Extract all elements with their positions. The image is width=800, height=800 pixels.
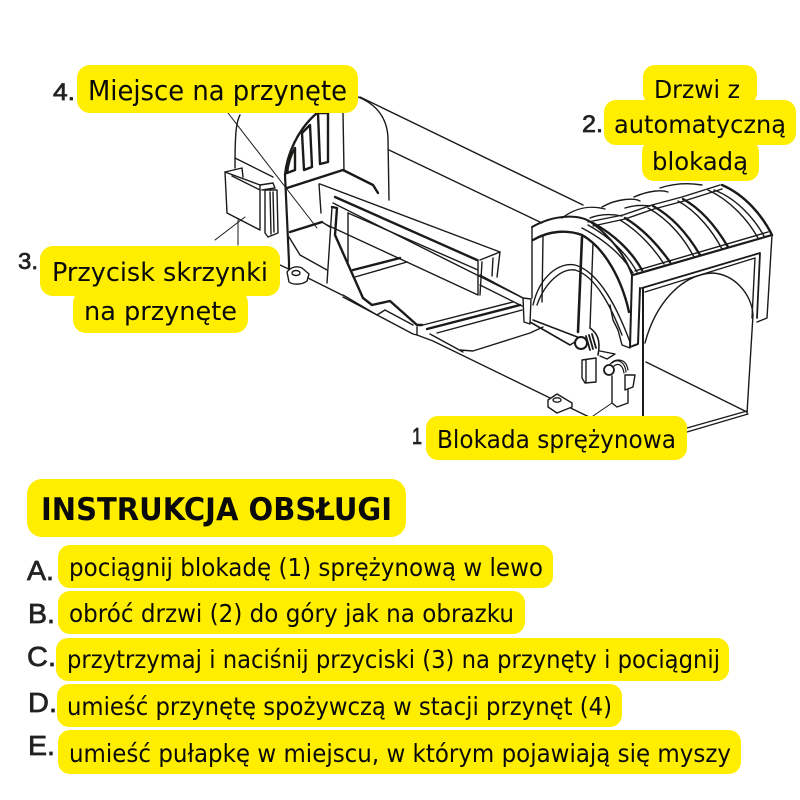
bait button box (215, 113, 317, 245)
foot right (548, 394, 572, 413)
callout: 4 bait place (77, 65, 358, 113)
number 4: 4. (53, 79, 75, 106)
callout: 4 bait place: Miejsce na przynęte (88, 74, 347, 107)
number 3: 3. (18, 248, 38, 274)
foot left (287, 267, 309, 284)
rear arch and compartment (285, 97, 389, 272)
step C: przytrzymaj i naciśnij przyciski (3) na przynęty i pociągnij (67, 645, 720, 674)
number 1: 1 (412, 423, 422, 449)
callout: 1 spring lock (426, 416, 687, 460)
callout: 3 bait box button: na przynęte (84, 297, 237, 327)
callout: 2 door with automatic lock: automatyczną (614, 110, 786, 139)
step E: umieść pułapkę w miejscu, w którym pojawiają się myszy (69, 739, 731, 768)
callout: 1 spring lock: Blokada sprężynowa (437, 425, 676, 454)
callout: 2 door with automatic lock: Drzwi z (654, 75, 740, 104)
callout: 2 door with automatic lock (604, 65, 796, 181)
heading: instructions: INSTRUKCJA OBSŁUGI (41, 492, 392, 528)
step A: A. (27, 555, 54, 586)
bait trough (319, 184, 531, 335)
step E (28, 730, 741, 774)
step D (28, 684, 622, 727)
door (532, 184, 772, 432)
roof ribs (588, 185, 720, 222)
step E: E. (28, 730, 55, 761)
heading: instructions (27, 479, 406, 537)
trap body long edges (280, 97, 600, 422)
step B: B. (28, 598, 55, 629)
callout: 3 bait box button: Przycisk skrzynki (52, 258, 268, 288)
step C (27, 638, 729, 681)
step B: obróć drzwi (2) do góry jak na obrazku (69, 599, 514, 628)
diagram: mouse trap line drawing (215, 97, 772, 432)
callout: 3 bait box button (40, 246, 280, 333)
callout: 2 door with automatic lock: blokadą (652, 147, 748, 176)
spring lock (530, 320, 635, 416)
step D: umieść przynętę spożywczą w stacji przynęt (4) (67, 692, 612, 721)
step B (28, 591, 525, 634)
step A: pociągnij blokadę (1) sprężynową w lewo (69, 553, 543, 582)
number 2: 2. (582, 111, 603, 138)
step A (27, 545, 553, 588)
step D: D. (28, 687, 57, 718)
step C: C. (27, 641, 56, 672)
